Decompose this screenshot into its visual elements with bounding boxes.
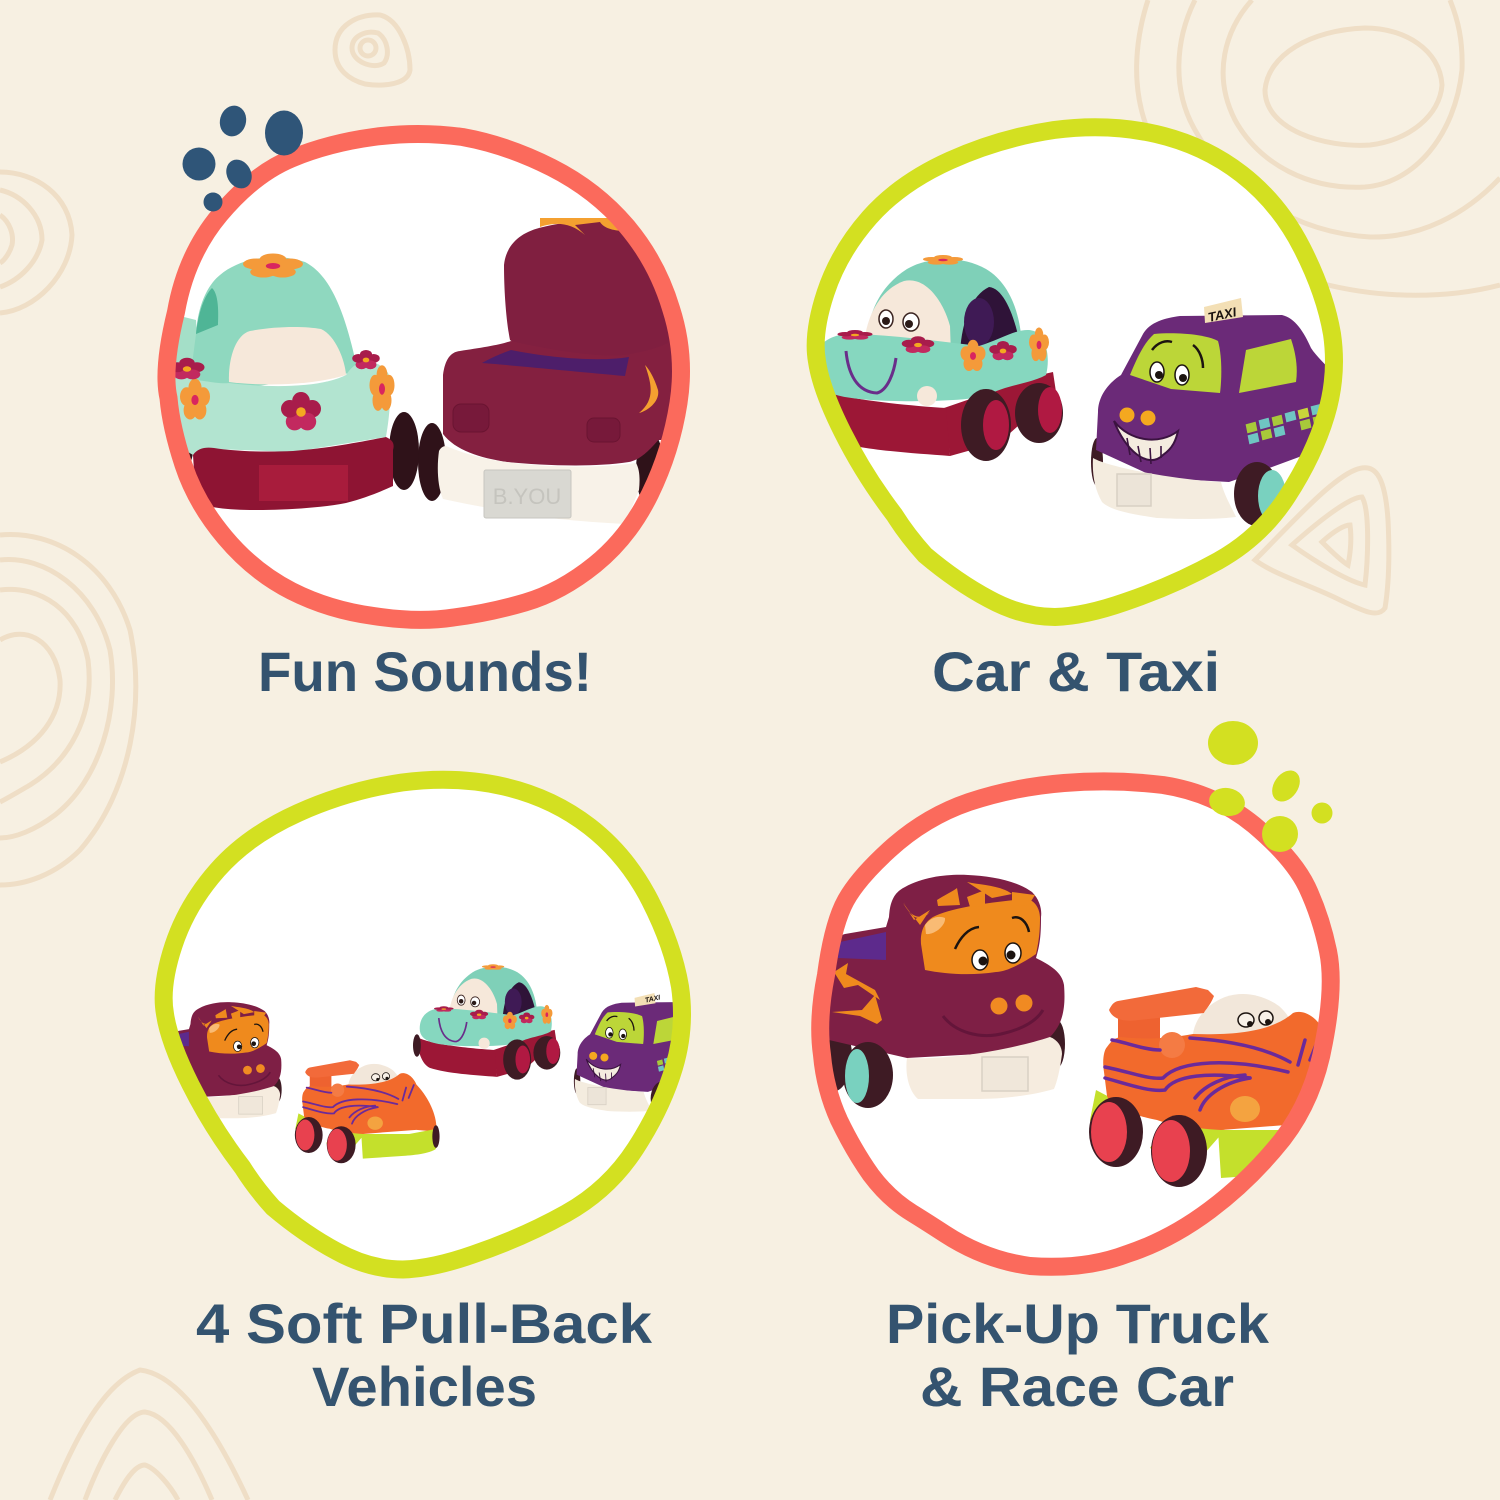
coral frame: [166, 134, 681, 620]
photo frame white: [816, 127, 1334, 617]
maroon truck back: B.YOU: [493, 484, 561, 509]
photo frame white: [820, 781, 1331, 1267]
panel: pick-up truck and race car: [812, 781, 1370, 1267]
coral frame: [820, 781, 1331, 1267]
panel: four vehicles: [151, 780, 710, 1270]
small racer: [295, 1060, 440, 1163]
heading: four soft pull-back vehicles: [196, 1292, 653, 1418]
navy dot cluster: [182, 103, 303, 212]
heading: four soft pull-back vehicles: Vehicles: [312, 1355, 537, 1418]
photo: mint car and purple taxi: [800, 255, 1345, 526]
orange racer: [1089, 987, 1318, 1187]
photo frame white: [166, 134, 681, 620]
mint car: [800, 255, 1063, 461]
taxi sign text: TAXI: [1206, 304, 1238, 325]
photo: truck and racer: [829, 874, 1318, 1187]
heading: car and taxi: Car & Taxi: [932, 640, 1220, 703]
maroon truck back: [418, 218, 674, 524]
small car: [413, 964, 560, 1080]
lime frame: [164, 780, 682, 1270]
heading: pick-up truck and race car: [886, 1292, 1270, 1418]
photo: back of mint car and maroon truck: [168, 218, 674, 524]
photo frame white: [164, 780, 682, 1270]
photo: four vehicles: [178, 964, 673, 1164]
heading: pick-up truck and race car: & Race Car: [920, 1355, 1234, 1418]
small taxi: [574, 993, 673, 1112]
small taxi sign text: TAXI: [644, 994, 662, 1005]
purple taxi: [1091, 298, 1345, 526]
heading: four soft pull-back vehicles: 4 Soft Pull-Back: [196, 1292, 653, 1355]
panel: car and taxi: [800, 127, 1345, 617]
small truck: [178, 1002, 282, 1118]
heading: fun sounds: Fun Sounds!: [258, 640, 592, 703]
maroon truck: [812, 875, 1065, 1108]
panel: fun sounds: [166, 134, 681, 620]
mint car back: [168, 254, 419, 510]
heading: pick-up truck and race car: Pick-Up Truck: [886, 1292, 1270, 1355]
lime frame: [816, 127, 1334, 617]
lime dot cluster: [1207, 721, 1332, 852]
